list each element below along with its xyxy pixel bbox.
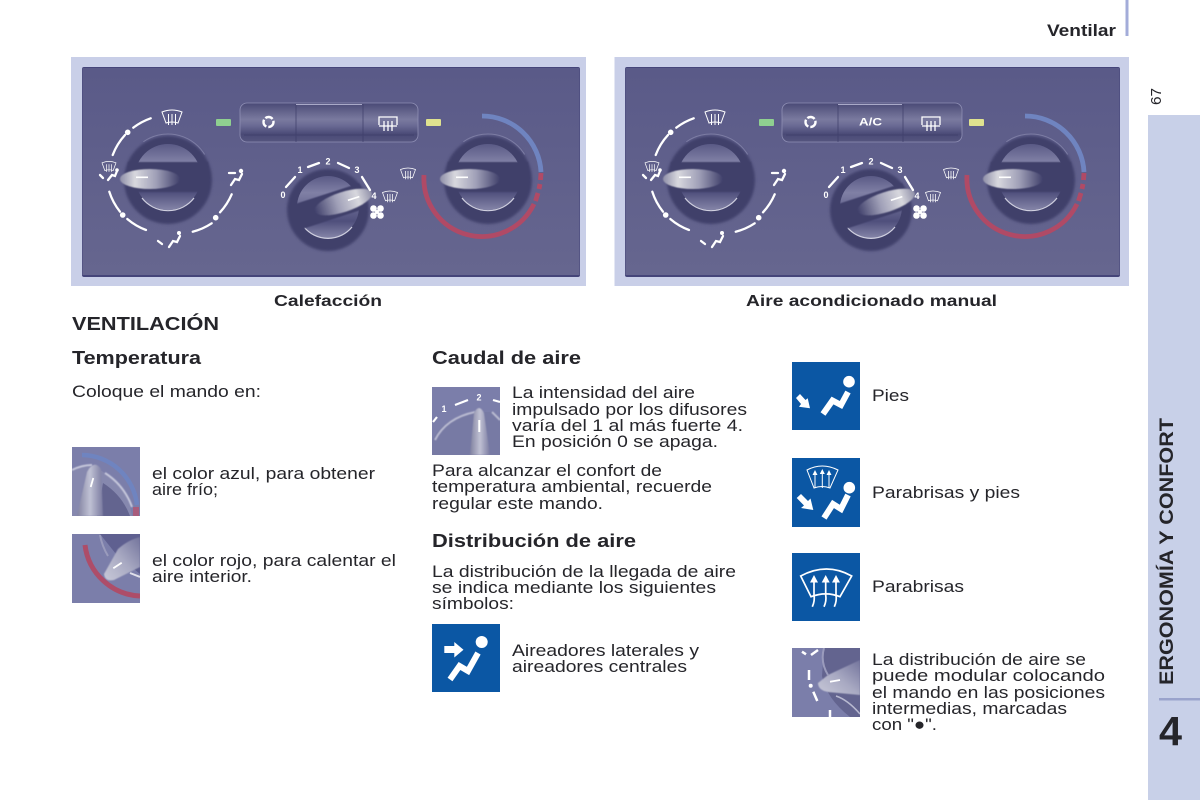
text: intermediate positions: puede modular colocando xyxy=(872,666,1105,685)
button block: A/C xyxy=(859,116,882,128)
icon: fan dial: 1 xyxy=(442,404,447,414)
text: intensity: impulsado por los difusores xyxy=(512,400,747,419)
heading: distribution: Distribución de aire xyxy=(432,530,636,551)
icon: feet xyxy=(792,362,860,430)
column: temperature xyxy=(72,347,396,603)
text: distribution: La distribución de la llegada de aire xyxy=(432,562,736,581)
text: comfort: regular este mando. xyxy=(432,494,603,513)
text: intermediate positions: con "●". xyxy=(872,715,937,734)
text: comfort xyxy=(432,461,712,513)
panel: manual air conditioning controls xyxy=(614,57,1129,286)
caption: heating: Calefacción xyxy=(274,293,382,310)
text: distribution: se indica mediante los siguientes xyxy=(432,578,716,597)
sidebar section title: ERGONOMÍA Y CONFORT xyxy=(1156,418,1178,685)
fan speed numbers: 2 xyxy=(868,156,874,166)
fan speed numbers: 1 xyxy=(298,165,303,175)
text: vents: Aireadores laterales y xyxy=(512,641,700,660)
text: distribution xyxy=(432,562,736,613)
fan speed numbers: 0 xyxy=(824,190,829,200)
text: intensity xyxy=(512,383,747,451)
intro text: Coloque el mando en: xyxy=(72,382,261,401)
icon: fan dial xyxy=(432,387,500,455)
fan speed numbers: 1 xyxy=(840,165,846,175)
text: intermediate positions xyxy=(872,650,1105,734)
text: red xyxy=(152,551,396,586)
column: distribution symbols xyxy=(792,362,1105,734)
button block xyxy=(782,103,962,142)
text: distribution: símbolos: xyxy=(432,594,514,613)
fan speed numbers xyxy=(824,156,920,201)
icon: side and centre vents xyxy=(432,624,500,692)
text: vents xyxy=(512,641,700,676)
panel: heating controls xyxy=(71,57,586,286)
text: intensity: varía del 1 al más fuerte 4. xyxy=(512,416,743,435)
section title: VENTILACIÓN xyxy=(72,313,219,334)
icon: red knob xyxy=(72,534,140,603)
text: intermediate positions: el mando en las posiciones xyxy=(872,683,1105,702)
text: vents: aireadores centrales xyxy=(512,657,687,676)
icon: blue knob xyxy=(72,447,140,516)
text: comfort: temperatura ambiental, recuerde xyxy=(432,477,712,496)
button block xyxy=(240,103,418,142)
page header: Ventilar xyxy=(1047,22,1117,40)
text: intensity: En posición 0 se apaga. xyxy=(512,432,718,451)
text: comfort: Para alcanzar el confort de xyxy=(432,461,662,480)
icon: intermediate positions xyxy=(792,648,860,717)
sidebar tab xyxy=(1148,115,1200,800)
fan speed numbers: 0 xyxy=(280,190,286,200)
fan speed numbers: 3 xyxy=(354,165,360,175)
text: intermediate positions: intermedias, marcadas xyxy=(872,699,1067,718)
label: feet: Pies xyxy=(872,386,909,405)
heading: temperature: Temperatura xyxy=(72,347,202,368)
icon: fan dial: 2 xyxy=(476,392,482,402)
fan speed numbers: 3 xyxy=(898,165,903,175)
fan speed numbers: 4 xyxy=(372,191,377,201)
text: red: aire interior. xyxy=(152,567,252,586)
caption: air conditioning: Aire acondicionado manual xyxy=(746,293,997,310)
icon: windscreen and feet xyxy=(792,458,860,527)
icon: windscreen xyxy=(792,553,860,621)
fan speed numbers: 4 xyxy=(914,191,920,201)
heading: airflow: Caudal de aire xyxy=(432,347,581,368)
fan speed numbers: 2 xyxy=(326,156,331,166)
text: intensity: La intensidad del aire xyxy=(512,383,695,402)
text: red: el color rojo, para calentar el xyxy=(152,551,396,570)
page header xyxy=(1047,0,1128,40)
text: intermediate positions: La distribución de aire se xyxy=(872,650,1086,669)
text: blue xyxy=(152,464,375,499)
page number: 67 xyxy=(1148,88,1165,105)
label: windscreen: Parabrisas xyxy=(872,577,964,596)
column: airflow xyxy=(432,347,747,692)
text: blue: aire frío; xyxy=(152,480,218,499)
label: windscreen and feet: Parabrisas y pies xyxy=(872,483,1020,502)
text: blue: el color azul, para obtener xyxy=(152,464,375,483)
fan speed numbers xyxy=(280,156,377,201)
chapter number: 4 xyxy=(1159,708,1182,754)
